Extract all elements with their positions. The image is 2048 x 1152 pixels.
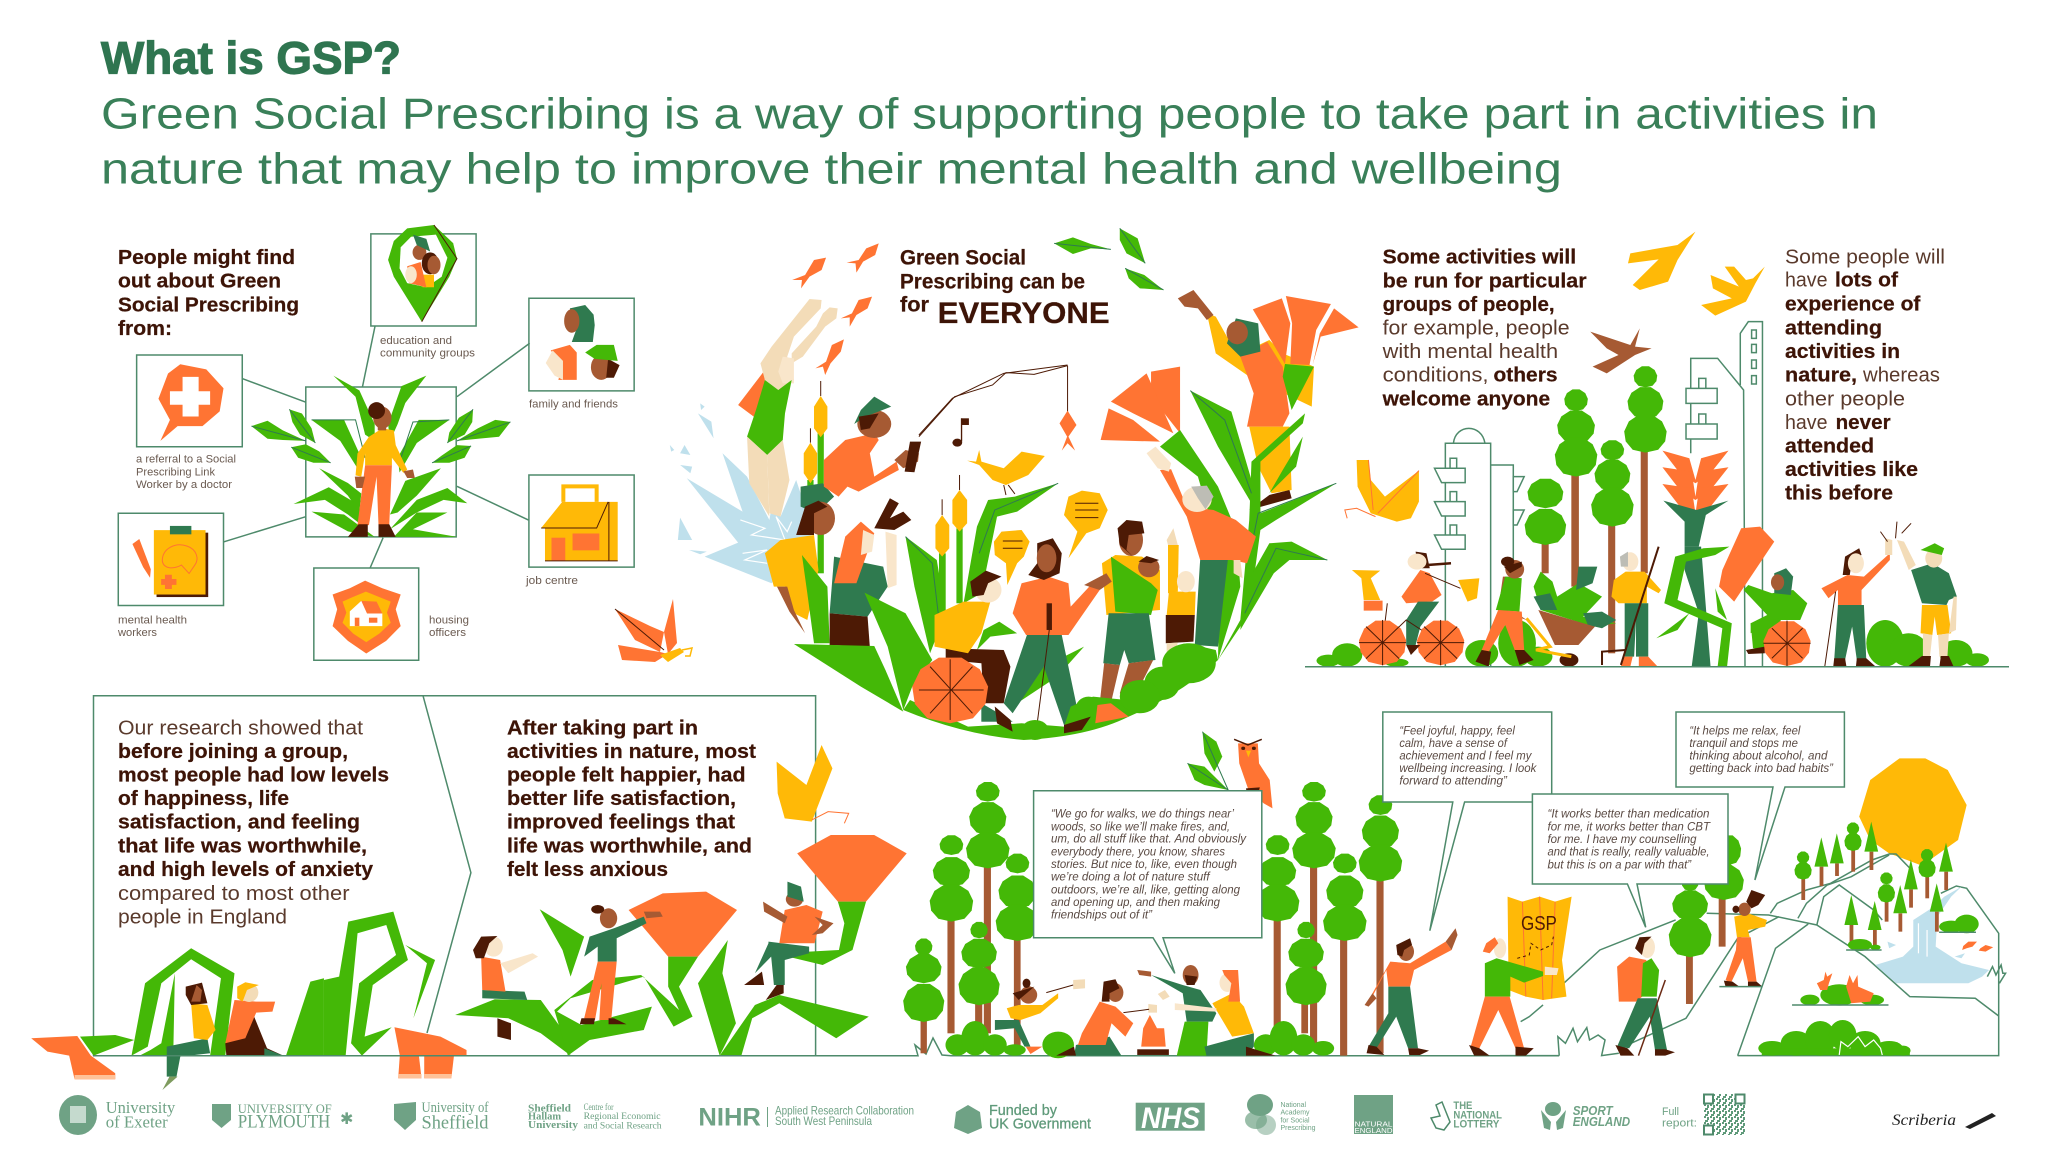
bushes (945, 1021, 1334, 1058)
logo: Sport England: ENGLAND (1573, 1115, 1630, 1129)
logo strip (59, 1094, 1996, 1135)
logo: NHS: NHS (1141, 1102, 1200, 1135)
text: green social prescribing for everyone: Green Social (900, 246, 1026, 269)
logo: Sheffield Hallam University: Centre for (584, 1102, 614, 1113)
title: What is GSP? (101, 32, 401, 84)
text: some activities (1382, 246, 1587, 410)
panel: research before and after (31, 696, 907, 1090)
quote bubble: helps me relax (1676, 712, 1844, 880)
icon: clipboard with brain (132, 526, 208, 597)
woman with binoculars (830, 498, 911, 647)
person with binoculars on hill (1719, 890, 1767, 987)
quote bubble: walks in the woods: we’re doing a lot of nature stuff (1051, 872, 1211, 884)
text: before joining: and high levels of anxiety (118, 859, 374, 881)
text: before joining (118, 717, 389, 928)
labels for sources: Prescribing Link (136, 466, 215, 478)
quote bubble: helps me relax: thinking about alcohol, and (1689, 750, 1828, 762)
logo: The National Lottery: NATIONAL (1453, 1109, 1502, 1121)
logo: University of Exeter (59, 1095, 176, 1135)
person fishing (824, 365, 1076, 497)
text: green social prescribing for everyone (900, 246, 1110, 330)
quote bubble: helps me relax: getting back into bad habits” (1689, 763, 1834, 775)
icon: person among leaves (251, 376, 511, 537)
flower and stems (1101, 367, 1336, 660)
heading: people might find out: out about Green (118, 271, 281, 293)
text: before joining: satisfaction, and feeling (118, 812, 360, 834)
labels for sources: family and friends (529, 399, 619, 411)
text: some people will: lots of (1835, 270, 1898, 292)
logo: Sheffield Hallam University: Hallam (528, 1111, 562, 1122)
logo: NIHR: South West Peninsula (775, 1114, 872, 1128)
logo: National Academy for Social Prescribing: Academy (1280, 1108, 1310, 1117)
logo: University of Sheffield: Sheffield (422, 1112, 489, 1133)
text: some activities: conditions, (1383, 365, 1489, 387)
logo: University of Exeter: University (106, 1098, 176, 1117)
logo: Funded by UK Government: UK Government (989, 1115, 1092, 1132)
quote bubble: better than medication: but this is on a par with that” (1548, 859, 1692, 871)
hill outlines (1500, 854, 2006, 1056)
connector lines and boxes (118, 234, 634, 660)
panel: hiking hillside scene (1469, 758, 2006, 1056)
text: some activities: Some activities will (1383, 246, 1576, 268)
quote bubble: walks in the woods: stories. But nice to, like, even though (1051, 859, 1237, 871)
two people high-fiving (1821, 522, 1957, 667)
panel: how people find out (117, 225, 634, 660)
wheelbarrow gardener (1476, 557, 1616, 667)
labels for sources: Worker by a doctor (136, 479, 232, 491)
logo: Funded by UK Government: Funded by (989, 1102, 1057, 1119)
woman with walking stick (995, 538, 1112, 733)
text: some people will: have (1785, 270, 1828, 292)
logo: National Academy for Social Prescribing: National (1280, 1100, 1306, 1109)
text: some activities: be run for particular (1383, 270, 1587, 292)
bowl of green leaves (794, 593, 1218, 740)
text: some people will: never (1836, 412, 1891, 434)
quote bubble: feel joyful: forward to attending” (1399, 776, 1508, 788)
cattails (801, 381, 967, 647)
owl and leaves (1187, 732, 1272, 808)
heading: people might find out: from: (118, 318, 172, 340)
woodland trees (903, 782, 1402, 1056)
labels for sources: community groups (380, 348, 476, 360)
text: green social prescribing for everyone: for (900, 294, 929, 317)
quote bubble: better than medication: for me. I have my counselling (1548, 834, 1697, 846)
icon: orange butterfly (615, 599, 692, 662)
logo: NIHR: Applied Research Collaboration (775, 1103, 914, 1117)
logo: Sheffield Hallam University: University (528, 1120, 578, 1131)
logo: Sheffield Hallam University: Sheffield (528, 1104, 571, 1115)
person in wheelchair (935, 571, 1013, 722)
illustration: before and after scene (31, 745, 907, 1090)
labels for sources: housing (429, 615, 469, 627)
text: some people will: experience of (1785, 294, 1921, 316)
quote bubble: walks in the woods: “We go for walks, we do things near’ (1051, 809, 1234, 821)
large leaves (906, 483, 1084, 703)
campfire group (995, 965, 1276, 1056)
logo: Sheffield Hallam University: Regional Economic (584, 1112, 661, 1122)
pointing man (1365, 928, 1458, 1055)
Scriberia signature: Scriberia (1892, 1112, 1956, 1129)
quote bubble: helps me relax: “It helps me relax, feel (1689, 725, 1801, 737)
logo: NIHR (698, 1103, 914, 1132)
text: before joining: Our research showed that (118, 717, 363, 739)
yellow bird (967, 450, 1045, 495)
quote bubble: feel joyful (1383, 712, 1552, 931)
text: some people will (1785, 246, 1945, 504)
heading: people might find out: People might find (118, 247, 295, 269)
text: after taking part: felt less anxious (507, 859, 668, 881)
text: some people will: whereas (1862, 365, 1940, 387)
speech bubbles (994, 491, 1108, 585)
logo: Natural England: NATURAL (1354, 1120, 1392, 1129)
heading: people might find out (118, 247, 299, 340)
text: some activities: welcome anyone (1382, 388, 1550, 410)
quote bubble: walks in the woods: um, do all stuff like that. And obviously (1051, 834, 1247, 846)
quote bubble: feel joyful: calm, have a sense of (1399, 738, 1509, 750)
labels for sources: mental health (118, 615, 187, 627)
text: after taking part: people felt happier, had (507, 764, 746, 786)
logo: Natural England: ENGLAND (1354, 1126, 1393, 1135)
text: after taking part: improved feelings that (507, 812, 735, 834)
text: after taking part: better life satisfaction, (507, 788, 736, 810)
quote bubble: walks in the woods: friendships out of it” (1051, 910, 1153, 922)
icon: location pin with people (388, 225, 457, 322)
panel outline and divider (94, 696, 816, 1056)
logo: The National Lottery: THE (1453, 1100, 1472, 1112)
labels for sources: job centre (525, 575, 578, 587)
logo: National Academy for Social Prescribing: Prescribing (1280, 1123, 1316, 1132)
quote bubble: feel joyful: achievement and I feel my (1399, 750, 1533, 762)
logo: National Academy for Social Prescribing: for Social (1280, 1115, 1310, 1124)
text: after taking part: After taking part in (507, 717, 698, 739)
trees near path (1669, 835, 1744, 1004)
text: before joining: of happiness, life (118, 788, 289, 810)
text: before joining: people in England (118, 906, 287, 928)
labels for sources (117, 335, 619, 639)
text: some people will: this before (1785, 482, 1893, 504)
sun (1859, 758, 1967, 866)
wheelchair user in green (1744, 568, 1811, 666)
icon: doctor referral speech bubble (158, 364, 224, 441)
title: nature that may help to improve their mental health and wellbeing (101, 144, 1562, 193)
icon: family and friends heads (546, 305, 620, 380)
logo: Sheffield Hallam University (528, 1102, 662, 1131)
trees (1525, 366, 1667, 653)
quote bubble: walks in the woods: and opening up, and then making (1051, 897, 1221, 909)
family with baby and child (1095, 520, 1196, 723)
logo: University of Exeter: of Exeter (106, 1113, 168, 1132)
small hill trees (1794, 822, 1953, 948)
title: Green Social Prescribing is a way of supporting people to take part in activities in (101, 90, 1878, 139)
swimmer and splash (670, 299, 838, 583)
text: green social prescribing for everyone: EVERYONE (938, 297, 1110, 330)
heading: people might find out: Social Prescribing (118, 294, 299, 316)
person with map: GSP (1521, 913, 1557, 935)
quote bubble: walks in the woods: outdoors, we’re all, like, getting along (1051, 884, 1241, 896)
logo: University of Sheffield: University of (422, 1100, 489, 1116)
woman on left (765, 501, 835, 643)
text: some people will: Some people will (1785, 246, 1945, 268)
yellow butterfly (1345, 460, 1419, 522)
logo: Funded by UK Government (954, 1102, 1092, 1134)
labels for sources: workers (117, 627, 157, 639)
person with map (1469, 897, 1572, 1056)
logo: Sport England (1541, 1102, 1630, 1130)
left plants and seated people (31, 912, 467, 1090)
text: some activities: groups of people, (1383, 294, 1555, 316)
quote bubble: feel joyful: wellbeing increasing. I look (1399, 763, 1538, 775)
quote bubble: walks in the woods: woods, so like we’ll make fires, and, (1051, 822, 1230, 834)
cyclist with dog (1352, 552, 1479, 665)
logo: The National Lottery (1431, 1100, 1502, 1131)
text: before joining: that life was worthwhile, (118, 835, 367, 857)
buildings (1434, 322, 1762, 667)
text: after taking part (507, 717, 756, 881)
logo: The National Lottery: LOTTERY (1453, 1119, 1500, 1131)
woman in hijab with flower (1178, 290, 1359, 510)
quote bubble: feel joyful: “Feel joyful, happy, feel (1399, 725, 1515, 737)
labels for sources: officers (429, 627, 467, 639)
older man reaching (1147, 447, 1256, 647)
quote bubble: better than medication: and that is really, really valuable, (1548, 847, 1710, 859)
hiker with backpack (1615, 937, 1675, 1056)
full report QR code: Full (1662, 1106, 1679, 1118)
text: after taking part: life was worthwhile, and (507, 835, 752, 857)
birds (1590, 232, 1765, 373)
logo: University of Sheffield (394, 1100, 489, 1133)
logo: University of Plymouth: PLYMOUTH (238, 1112, 331, 1133)
quote bubble: walks in the woods (1034, 791, 1262, 973)
labels for sources: education and (380, 335, 452, 347)
ground line: activities (1305, 666, 2009, 668)
text: green social prescribing for everyone: Prescribing can be (900, 270, 1085, 293)
text: some activities: for example, people (1383, 317, 1570, 339)
title (101, 32, 1878, 193)
quote bubble: helps me relax: tranquil and stops me (1689, 738, 1798, 750)
panel: campfire woodland scene (903, 732, 1458, 1058)
logo: NIHR: NIHR (698, 1104, 761, 1132)
icon: briefcase job centre (541, 486, 618, 561)
text: some people will: nature, (1785, 365, 1857, 387)
full report QR code: report: (1662, 1118, 1697, 1130)
Scriberia signature (1892, 1112, 1996, 1129)
text: some people will: attended (1785, 435, 1874, 457)
right plants and people (455, 745, 907, 1056)
logo: University of Plymouth (212, 1102, 353, 1133)
logo: University of Plymouth: ✱ (340, 1111, 353, 1128)
icon: housing shield (333, 581, 401, 653)
panel: everyone circle (670, 228, 1359, 740)
labels for sources: a referral to a Social (136, 454, 236, 466)
text: some people will: have (1785, 412, 1828, 434)
older man with rake (1602, 547, 1661, 667)
text: some people will: activities in (1785, 341, 1900, 363)
text: some people will: other people (1785, 388, 1905, 410)
ground line: research and journey (93, 1038, 1559, 1056)
quote bubble: better than medication (1532, 794, 1728, 927)
fish and leaves (792, 228, 1164, 375)
text: before joining: before joining a group, (118, 741, 348, 763)
text: after taking part: activities in nature, most (507, 741, 756, 763)
waterfall and pool (1875, 887, 1989, 983)
logo: National Academy for Social Prescribing (1245, 1094, 1316, 1135)
text: before joining: compared to most other (118, 883, 350, 905)
text: some people will: attending (1785, 317, 1882, 339)
logo: University of Plymouth: UNIVERSITY OF (238, 1102, 332, 1116)
text: some activities: with mental health (1382, 341, 1558, 363)
full report QR code (1662, 1094, 1745, 1135)
text: some activities: others (1494, 365, 1558, 387)
bushes (1317, 620, 1989, 667)
bushes, rabbits and fish (1758, 915, 1993, 1056)
panel: activities scene (1317, 232, 1989, 667)
quote bubble: better than medication: for me, it works better than CBT (1548, 821, 1711, 833)
quote bubble: better than medication: “It works better than medication (1548, 809, 1710, 821)
logo: Sheffield Hallam University: and Social Research (584, 1121, 662, 1131)
quote bubble: walks in the woods: everybody there, you know, shares (1051, 847, 1225, 859)
text: some people will: activities like (1785, 459, 1918, 481)
orange and green plant (1656, 451, 1774, 667)
logo: Natural England (1354, 1095, 1393, 1135)
logo: Sport England: SPORT (1573, 1104, 1614, 1118)
text: before joining: most people had low levels (118, 764, 389, 786)
